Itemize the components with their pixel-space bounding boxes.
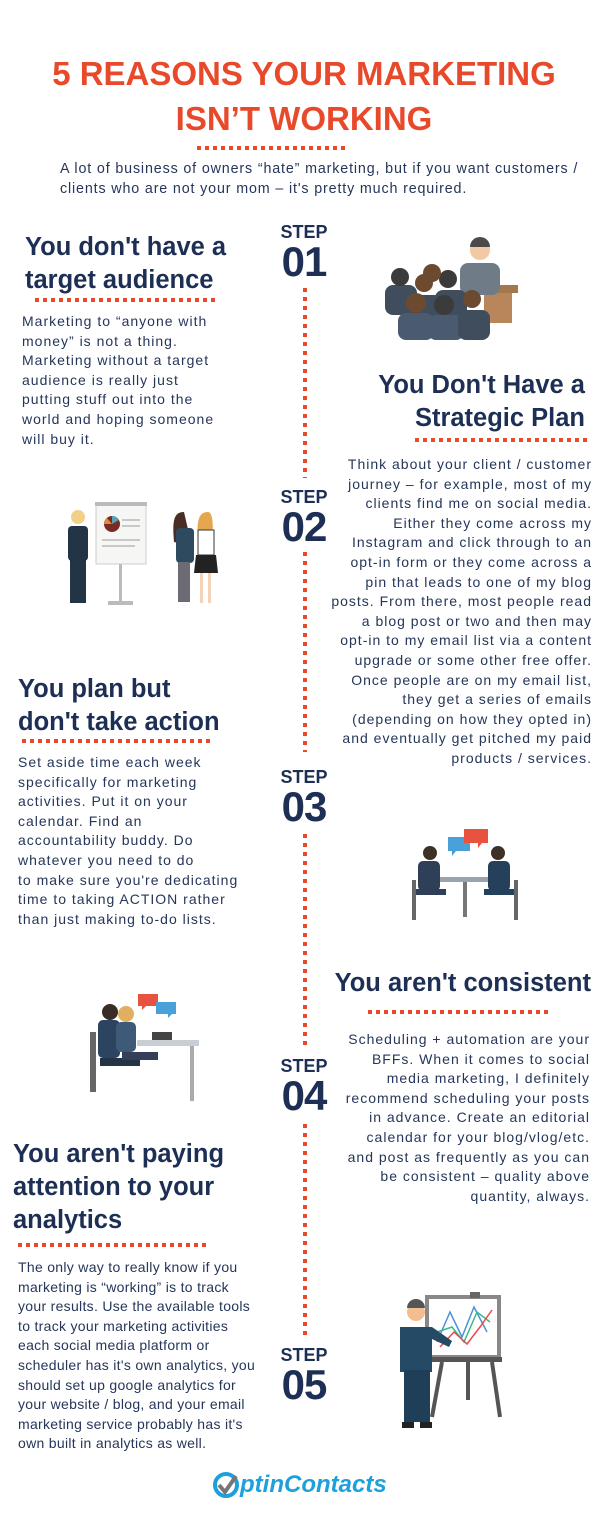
body 4: calendar for your blog/vlog/etc. [367, 1129, 590, 1145]
step 03 label: STEP [280, 767, 328, 787]
heading 2: Strategic Plan [415, 404, 585, 432]
icon: audience and speaker [385, 237, 518, 340]
body 2: Once people are on my email list, [351, 672, 592, 688]
intro text: A lot of business of owners “hate” marketing, but if you want customers / [60, 161, 578, 177]
icon: man presenting chart [400, 1292, 502, 1428]
body 5: scheduler has it's own analytics, you [18, 1357, 255, 1373]
heading 5 [13, 1140, 224, 1234]
heading 1 [25, 233, 226, 294]
step 04 label: STEP [280, 1056, 328, 1076]
body 2: they get a series of emails [402, 691, 592, 707]
body 2: and eventually get pitched my paid [342, 730, 592, 746]
body 4: BFFs. When it comes to social [372, 1051, 590, 1067]
body 3: than just making to-do lists. [18, 911, 217, 927]
intro text [60, 161, 578, 197]
heading 5: You aren't paying [13, 1140, 224, 1168]
body 4 [346, 1031, 590, 1204]
heading 3: You plan but [18, 675, 171, 703]
heading 1: target audience [25, 266, 213, 294]
icon: meeting at table [412, 829, 518, 920]
heading 2: You Don't Have a [378, 371, 585, 399]
body 1: putting stuff out into the [22, 391, 193, 407]
body 3: to make sure you're dedicating [18, 872, 238, 888]
step 01 label: STEP [280, 222, 328, 242]
body 2 [331, 456, 592, 766]
body 5: marketing service probably has it's [18, 1416, 243, 1432]
body 1: Marketing without a target [22, 352, 209, 368]
body 1: money” is not a thing. [22, 333, 178, 349]
heading 1: You don't have a [25, 233, 226, 261]
body 3: whatever you need to do [18, 852, 194, 868]
body 3 [18, 754, 238, 927]
heading 3: don't take action [18, 708, 220, 736]
intro text: clients who are not your mom – it's pretty much required. [60, 181, 467, 197]
step 05 label: STEP [280, 1345, 328, 1365]
body 2: Instagram and click through to an [352, 534, 592, 550]
step 05 label: 05 [282, 1361, 326, 1408]
timeline dotted line [303, 288, 307, 1335]
title [52, 55, 556, 137]
title underline [197, 146, 349, 150]
title: ISN’T WORKING [176, 100, 432, 137]
body 5: marketing is “working” is to track [18, 1279, 229, 1295]
body 5: The only way to really know if you [18, 1259, 238, 1275]
body 1: world and hoping someone [22, 411, 214, 427]
body 2: upgrade or some other free offer. [355, 652, 592, 668]
body 2: (depending on how they opted in) [352, 711, 592, 727]
heading 5: attention to your [13, 1173, 214, 1201]
body 2: journey – for example, most of my [348, 476, 592, 492]
icon: office workers at desk [90, 994, 199, 1101]
body 2: Think about your client / customer [348, 456, 592, 472]
step 03 label: 03 [282, 783, 326, 830]
body 5: should set up google analytics for [18, 1377, 236, 1393]
heading 3 [18, 675, 220, 736]
body 3: calendar. Find an [18, 813, 142, 829]
body 1 [22, 313, 214, 447]
logo: OptinContacts: ptinContacts [240, 1471, 387, 1498]
body 5: your website / blog, and your email [18, 1396, 245, 1412]
step 02 label: STEP [280, 487, 328, 507]
body 3: specifically for marketing [18, 774, 197, 790]
heading 5: analytics [13, 1206, 122, 1234]
body 4: quantity, always. [471, 1188, 590, 1204]
body 5: each social media platform or [18, 1337, 210, 1353]
heading 4: You aren't consistent [335, 969, 591, 997]
body 4: recommend scheduling your posts [346, 1090, 590, 1106]
body 5: to track your marketing activities [18, 1318, 228, 1334]
body 1: Marketing to “anyone with [22, 313, 207, 329]
body 2: Either they come across my [393, 515, 592, 531]
step 02 label: 02 [282, 503, 326, 550]
step 04 label: 04 [282, 1072, 326, 1119]
body 4: and post as frequently as you can [348, 1149, 590, 1165]
body 2: clients find me on social media. [365, 495, 592, 511]
body 5 [18, 1259, 255, 1451]
body 3: activities. Put it on your [18, 793, 188, 809]
body 3: Set aside time each week [18, 754, 202, 770]
title: 5 REASONS YOUR MARKETING [52, 55, 556, 92]
body 1: audience is really just [22, 372, 179, 388]
body 3: accountability buddy. Do [18, 832, 194, 848]
heading 2 [378, 371, 586, 432]
body 2: opt-in to my email list via a content [340, 632, 592, 648]
body 5: own built in analytics as well. [18, 1435, 206, 1451]
body 5: your results. Use the available tools [18, 1298, 250, 1314]
body 2: posts. From there, most people read [331, 593, 592, 609]
body 4: be consistent – quality above [380, 1168, 590, 1184]
body 4: in advance. Create an editorial [369, 1109, 590, 1125]
body 2: opt-in form or they come across a [350, 554, 592, 570]
body 2: a blog post or two and then may [362, 613, 592, 629]
body 1: will buy it. [22, 431, 95, 447]
step 01 label: 01 [282, 238, 326, 285]
body 2: products / services. [451, 750, 592, 766]
body 2: pin that leads to one of my blog [365, 574, 592, 590]
body 4: Scheduling + automation are your [348, 1031, 590, 1047]
body 3: time to taking ACTION rather [18, 891, 226, 907]
body 4: media marketing, I definitely [387, 1070, 590, 1086]
icon: presentation team [68, 502, 218, 605]
